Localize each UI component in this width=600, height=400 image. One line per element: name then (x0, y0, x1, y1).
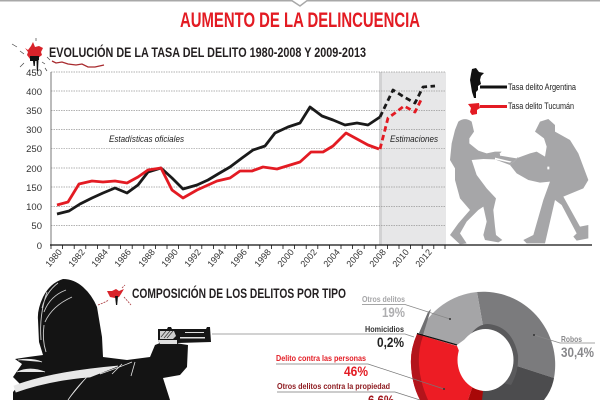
y axis labels: 250 (26, 144, 42, 155)
y axis labels: 450 (26, 68, 42, 79)
y axis labels: 350 (26, 106, 42, 117)
label: Otros delitos: 19% (382, 304, 405, 320)
annotation: estimates: Estimaciones (390, 134, 438, 145)
label: Delito contra las personas: Delito contra las personas (276, 353, 366, 363)
donut chart: crime composition (411, 292, 555, 400)
legend label: Tucuman: Tasa delito Tucumán (508, 101, 574, 111)
x axis labels: 2006 (344, 247, 365, 269)
donut hole (458, 329, 514, 391)
x axis labels: 1994 (205, 247, 226, 269)
estimates shaded band (379, 72, 446, 245)
y axis labels: 200 (26, 164, 42, 175)
series: Argentina (57, 86, 435, 214)
slice: Otros delitos (419, 292, 483, 345)
illustration: bag snatching silhouettes (450, 119, 588, 244)
x axis labels: 2000 (275, 247, 296, 269)
x axis labels: 1988 (136, 247, 157, 269)
y axis labels: 100 (26, 202, 42, 213)
heading: crime rate evolution: EVOLUCIÓN DE LA TASA DEL DELITO 1980-2008 Y 2009-2013 (49, 43, 366, 60)
y axis labels: 0 (37, 241, 42, 252)
x axis labels: 1996 (228, 247, 249, 269)
y axis labels: 150 (26, 183, 42, 194)
title: AUMENTO DE LA DELINCUENCIA (180, 9, 420, 32)
heading: composition by type: COMPOSICIÓN DE LOS DELITOS POR TIPO (132, 284, 346, 301)
label: Homicidios: 0,2% (377, 334, 404, 350)
label: Robos: 30,4% (561, 344, 594, 360)
label: Robos: Robos (561, 334, 582, 344)
label: Robos (533, 334, 595, 360)
line chart: crime rate 1980-2013 (26, 68, 592, 269)
icon: Tucuman map (468, 103, 480, 115)
icon: blood splat for composition heading (98, 285, 131, 305)
y axis labels: 300 (26, 125, 42, 136)
x axis labels: 2012 (413, 247, 434, 269)
legend line: Argentina (480, 86, 507, 88)
donut hole rim (470, 324, 518, 385)
x axis labels: 1980 (43, 247, 64, 269)
x axis labels (43, 247, 434, 269)
slice: Robos (477, 292, 555, 378)
label: Otros delitos contra la propiedad (277, 383, 420, 400)
series: Tucuman (57, 100, 421, 205)
y axis labels: 400 (26, 87, 42, 98)
slice: Homicidios (417, 334, 457, 345)
y axis labels: 50 (31, 221, 42, 232)
x axis labels: 1986 (112, 247, 133, 269)
x axis labels: 1982 (66, 247, 87, 269)
label: Otros delitos: Otros delitos (362, 294, 405, 304)
annotation: official statistics: Estadísticas oficiales (109, 134, 184, 145)
icon: Argentina map (470, 68, 484, 98)
label: Homicidios: Homicidios (365, 324, 404, 334)
icon: blood splat for line chart heading (12, 38, 104, 71)
x axis labels: 1992 (182, 247, 203, 269)
x axis labels: 2008 (367, 247, 388, 269)
label: Delito contra las personas (276, 353, 445, 390)
label: Otros delitos (362, 294, 451, 320)
x axis labels: 2004 (321, 247, 342, 269)
illustration: hooded figure with gun (13, 279, 211, 400)
label: Otros delitos contra la propiedad: Otros delitos contra la propiedad (277, 381, 390, 391)
legend (468, 68, 576, 115)
slice: other dark segment (482, 366, 554, 400)
legend label: Argentina: Tasa delito Argentina (508, 82, 576, 92)
x axis labels: 2002 (298, 247, 319, 269)
slice: Delito contra las personas (411, 334, 473, 400)
slice: Otros delitos contra la propiedad (468, 387, 483, 400)
pistol (158, 327, 211, 344)
x axis labels: 2010 (390, 247, 411, 269)
label: Homicidios (212, 324, 414, 350)
x axis labels: 1984 (89, 247, 110, 269)
y axis labels (26, 68, 42, 252)
label: Delito contra las personas: 46% (344, 363, 368, 379)
legend line: Tucuman (480, 105, 507, 108)
x axis labels: 1990 (159, 247, 180, 269)
x axis labels: 1998 (252, 247, 273, 269)
